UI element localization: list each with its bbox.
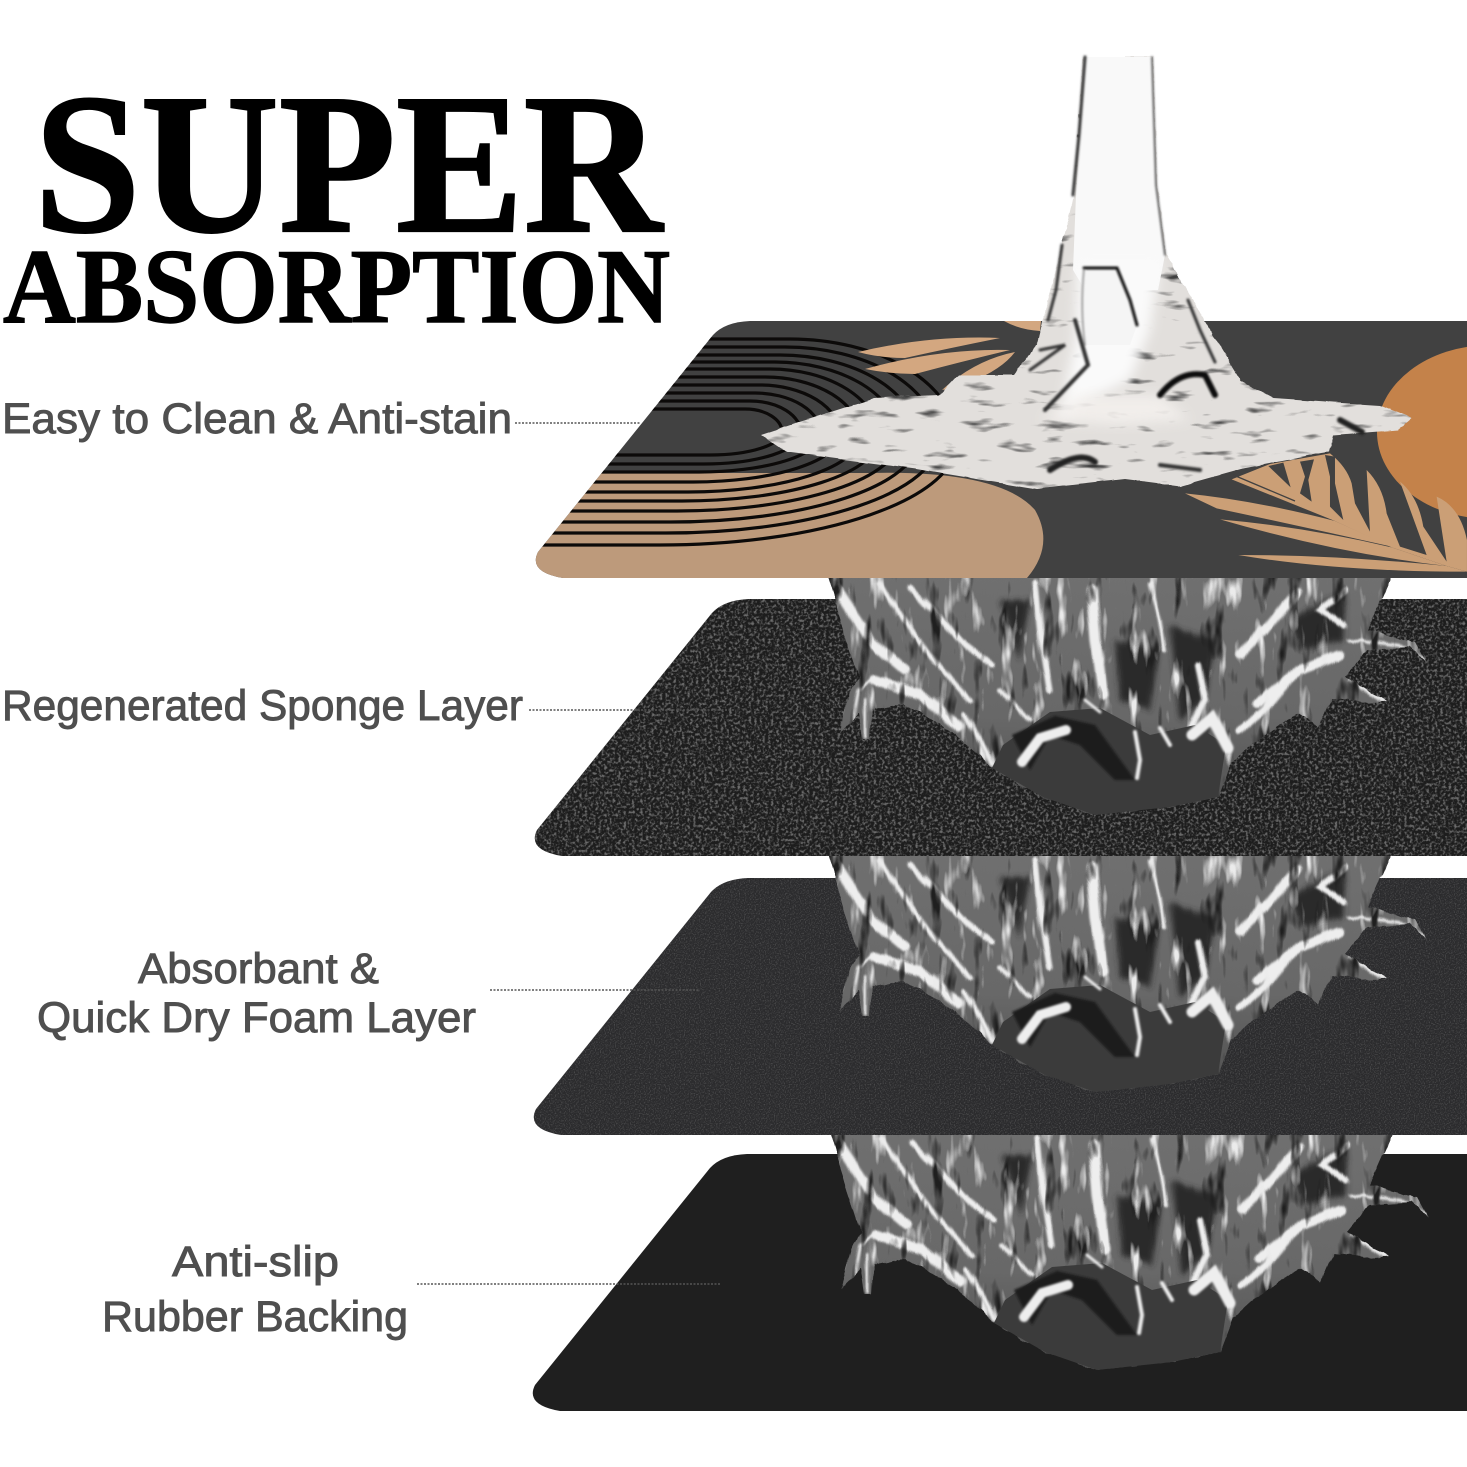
leader line 3 (490, 989, 700, 991)
leader line 1 (515, 422, 640, 424)
water splash on sponge layer (824, 568, 1426, 815)
water splash on rubber backing (826, 1123, 1428, 1370)
water column highlight (1073, 57, 1165, 290)
label: Easy to Clean & Anti-stain: Easy to Clean & Anti-stain (2, 395, 512, 443)
orange sun (1377, 345, 1467, 519)
leader line 2 (529, 709, 735, 711)
puddle highlight (1040, 395, 1190, 425)
puddle and cone body (761, 57, 1412, 489)
water column and puddle (761, 57, 1412, 489)
title: ABSORPTION: ABSORPTION (3, 228, 670, 345)
layer 3: foam mat (534, 878, 1467, 1135)
layer 2: sponge mat (535, 599, 1467, 856)
label: Quick Dry Foam Layer: Quick Dry Foam Layer (37, 994, 476, 1042)
leader line 4 (417, 1283, 720, 1285)
layer 4: rubber backing mat (533, 1154, 1467, 1411)
title: SUPER: SUPER (34, 54, 664, 275)
label: Anti-slip: Anti-slip (172, 1238, 339, 1286)
water splash on foam layer (824, 845, 1426, 1092)
label: Regenerated Sponge Layer: Regenerated Sponge Layer (2, 682, 523, 730)
label: Absorbant &: Absorbant & (138, 945, 379, 993)
inner bubble (1083, 267, 1137, 345)
fern leaf (1185, 453, 1467, 572)
tan half circle (520, 473, 1043, 578)
soft white glow in the cone (1060, 260, 1160, 420)
upper leaves (858, 321, 1041, 390)
layer 1: patterned top mat (500, 321, 1467, 578)
concentric arcs (542, 337, 944, 547)
water reflections (1030, 57, 1362, 470)
label: Rubber Backing: Rubber Backing (102, 1293, 408, 1341)
